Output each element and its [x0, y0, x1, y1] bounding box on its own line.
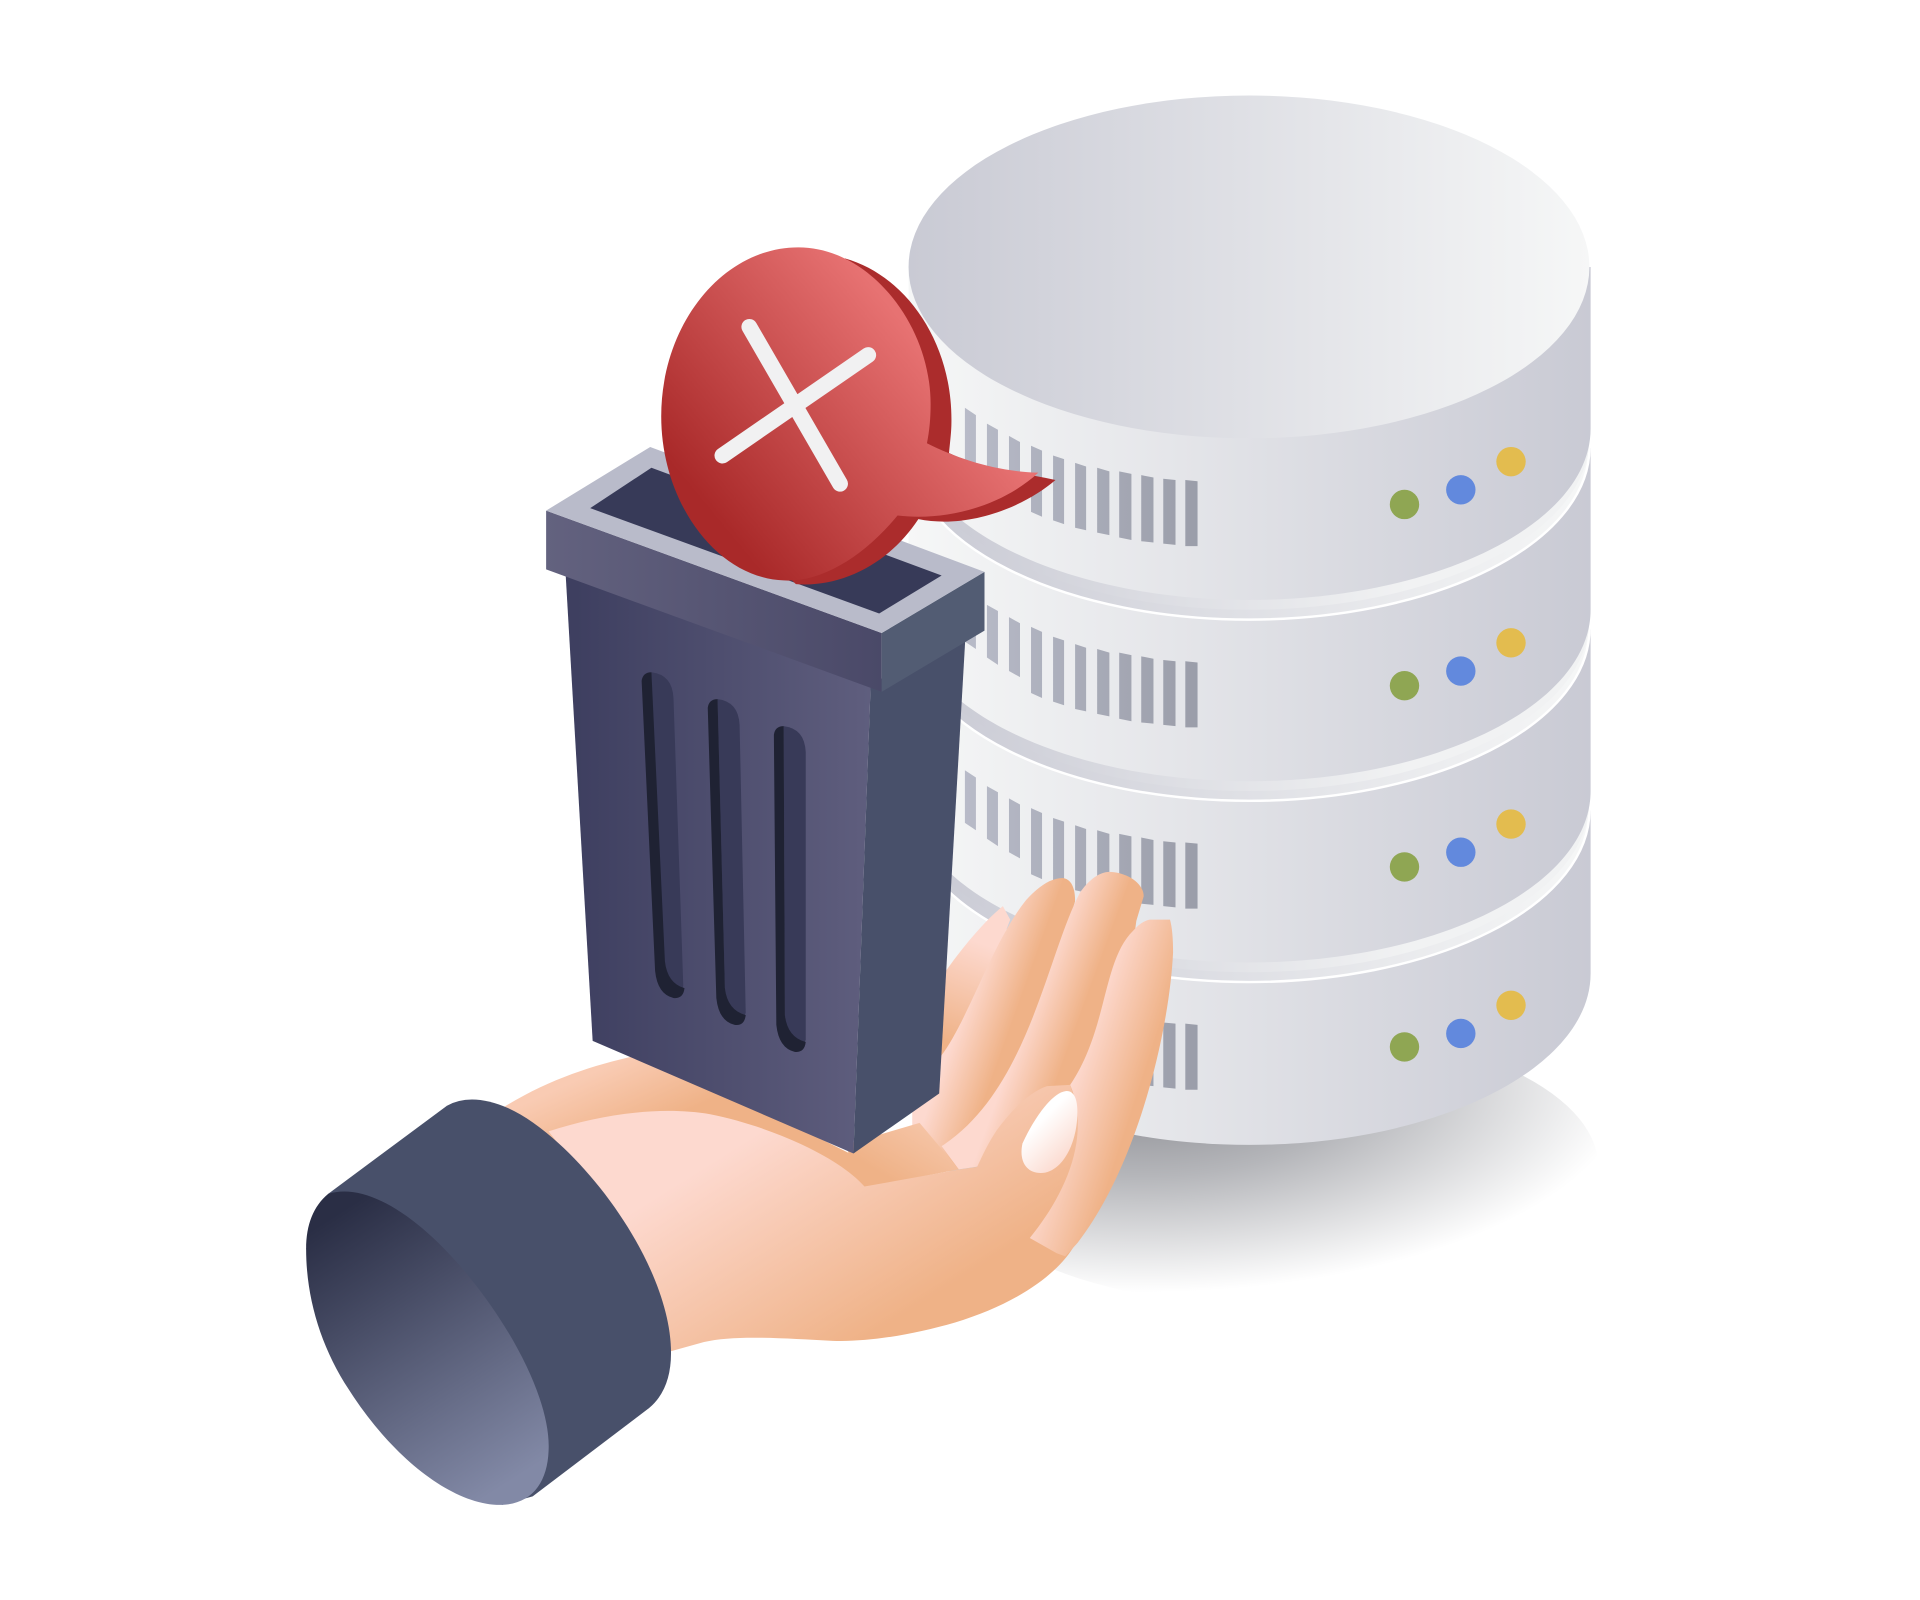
cuff opening — [306, 1192, 549, 1505]
server layer 2 — [909, 448, 1591, 781]
thumb — [1030, 920, 1173, 1256]
server layer 1 — [909, 267, 1591, 600]
cross — [722, 327, 868, 484]
slot 3 — [774, 726, 806, 1052]
can front — [566, 576, 871, 1153]
thumb nail — [1022, 1091, 1077, 1173]
slot 1 — [642, 672, 684, 998]
slot 2 — [708, 699, 746, 1025]
cylinder top — [909, 96, 1589, 438]
third finger — [942, 872, 1144, 1169]
red speech bubble with cross — [661, 247, 1056, 584]
bubble back — [747, 258, 1056, 584]
database cylinder — [909, 96, 1591, 1145]
server layer 3 — [909, 629, 1591, 962]
back of palm — [502, 1053, 882, 1206]
rim between layers 1 and 2 — [909, 267, 1589, 620]
lid front — [546, 511, 882, 692]
palm — [549, 1085, 1090, 1352]
shirt cuff — [306, 1100, 671, 1505]
ground shadow — [949, 1025, 1598, 1307]
hand — [502, 872, 1173, 1352]
lid opening — [590, 468, 942, 613]
far finger — [924, 906, 1010, 1065]
web between palm and fingers — [845, 1123, 959, 1188]
can side — [853, 624, 966, 1153]
server layer 4 — [909, 811, 1591, 1145]
second finger — [912, 878, 1075, 1169]
rim between layers 2 and 3 — [909, 448, 1589, 801]
lid side — [882, 572, 984, 692]
lid top — [546, 447, 984, 633]
trash can — [546, 447, 984, 1153]
rim between layers 3 and 4 — [909, 629, 1589, 982]
cuff band — [306, 1100, 671, 1505]
bubble front — [661, 247, 1038, 581]
